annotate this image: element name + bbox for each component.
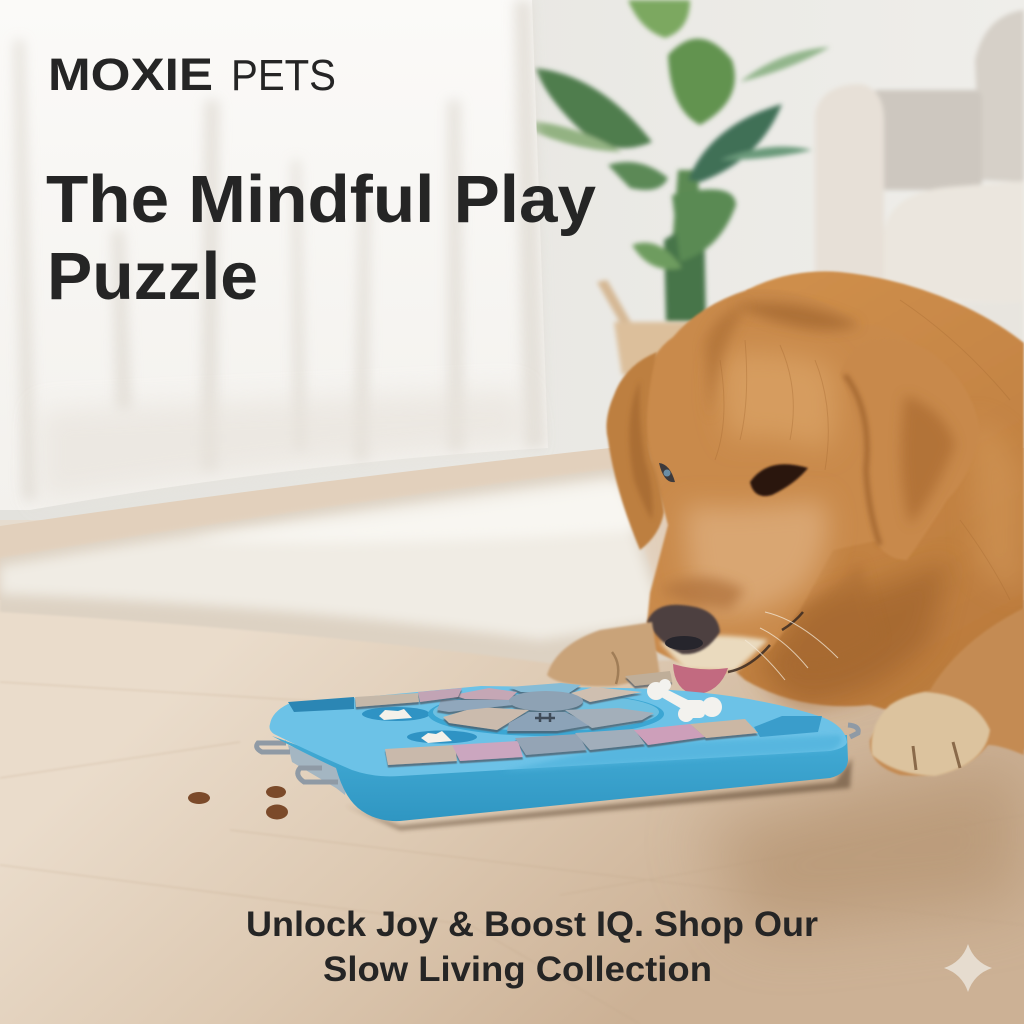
puzzle underside — [288, 745, 350, 795]
call to action: Slow Living Collection — [323, 950, 712, 989]
wooden floor — [0, 448, 1024, 1024]
call to action: Unlock Joy & Boost IQ. Shop Our — [246, 905, 818, 944]
woven basket — [597, 280, 692, 375]
whiskers — [745, 612, 838, 680]
puzzle toy — [257, 671, 858, 830]
icon: sparkle — [944, 944, 992, 992]
brand logo: MOXIE — [48, 49, 213, 100]
area rug — [0, 468, 680, 664]
dog front left paw — [547, 622, 660, 686]
dog left ear — [606, 352, 664, 550]
handles — [257, 725, 858, 782]
kibble pieces — [188, 786, 288, 820]
dog head — [640, 289, 950, 673]
dog mouth line — [728, 612, 803, 672]
dog eyes — [659, 463, 808, 496]
slots — [288, 697, 354, 712]
puzzle shadow — [345, 758, 852, 830]
sheer curtain — [0, 0, 548, 510]
title — [46, 162, 596, 314]
brand logo: PETS — [231, 51, 336, 100]
dog right ear — [840, 339, 980, 560]
potted plant — [510, 0, 830, 322]
call to action — [246, 905, 818, 989]
title: Puzzle — [47, 239, 258, 314]
dog body — [700, 271, 1024, 750]
white bone — [647, 679, 722, 722]
golden retriever — [547, 271, 1024, 776]
background wall — [0, 0, 1024, 520]
sofa — [815, 10, 1024, 352]
brand logo — [48, 49, 336, 100]
fur streaks — [715, 300, 1010, 600]
title: The Mindful Play — [46, 162, 596, 237]
dog nose — [647, 605, 720, 654]
puzzle top surface — [270, 686, 847, 776]
tiles — [355, 671, 758, 765]
dog front right leg and paw — [870, 608, 1024, 776]
dog tongue — [673, 664, 728, 695]
wheel — [428, 683, 664, 736]
puzzle body side — [272, 735, 848, 821]
treat holes — [362, 707, 477, 744]
